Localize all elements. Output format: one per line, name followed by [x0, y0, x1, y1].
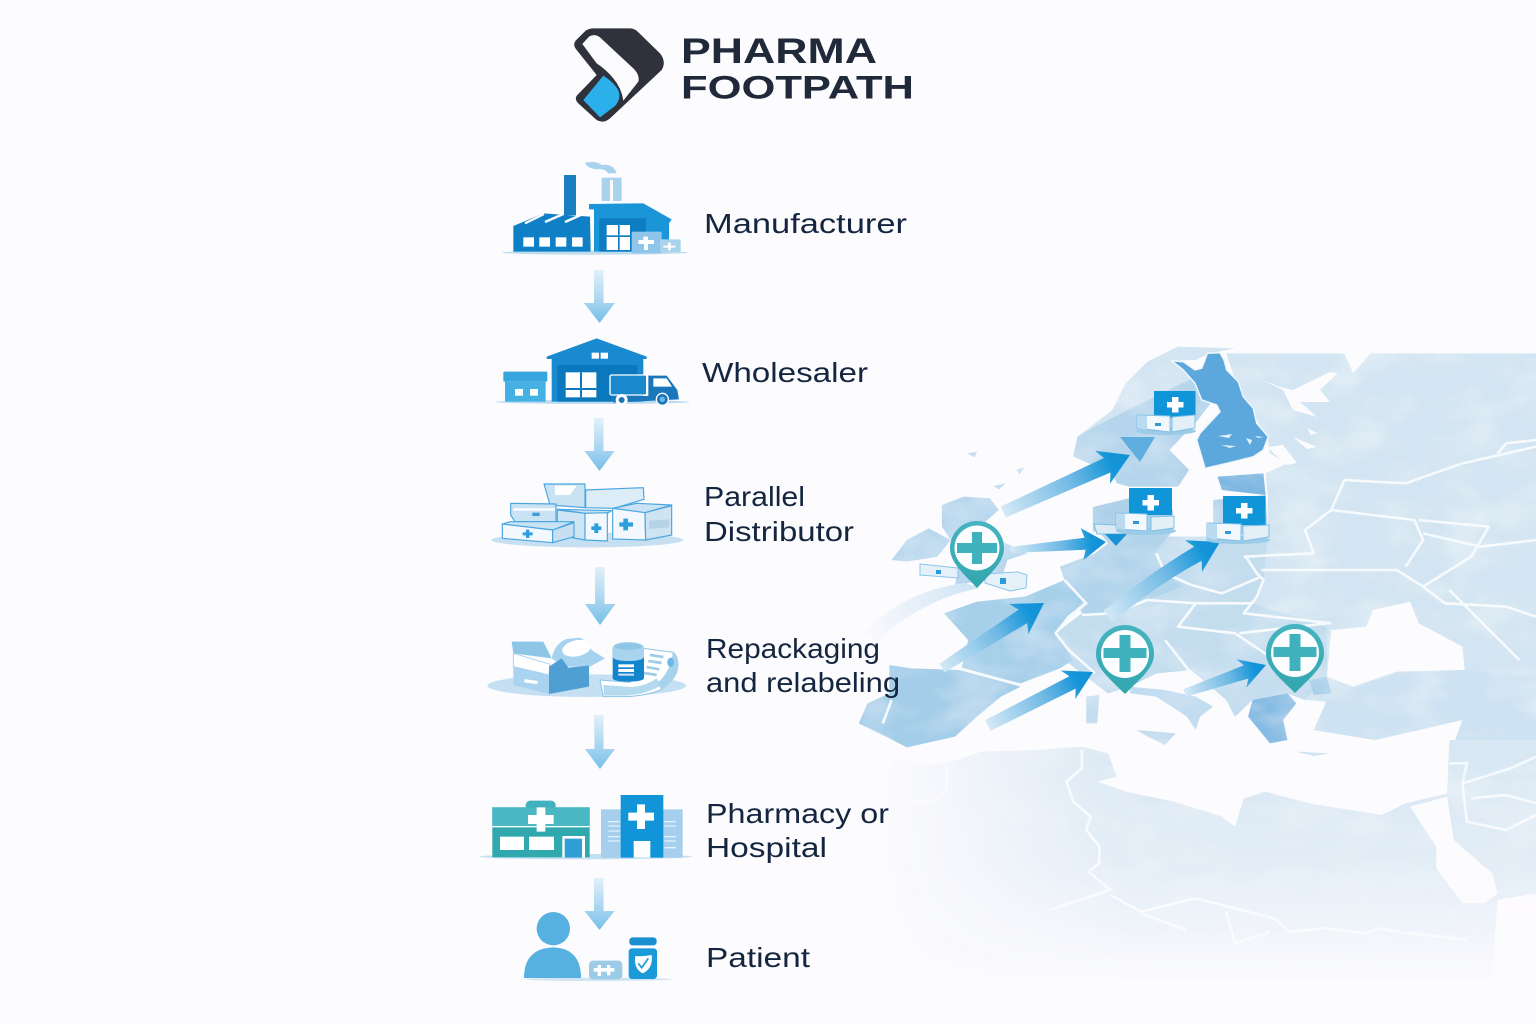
map icon: boxes in Denmark — [1094, 488, 1176, 546]
map of Europe — [858, 346, 1536, 945]
icon: stacked boxes — [491, 484, 683, 547]
icon: open box and labels — [487, 637, 686, 697]
title — [681, 32, 914, 106]
map pin: Italy — [1096, 625, 1154, 694]
map arrow: Spain to France — [932, 588, 1054, 683]
label: Patient: Patient — [706, 942, 810, 973]
label: Pharmacy or Hospital: Hospital — [706, 832, 827, 863]
label: Parallel Distributor: Distributor — [704, 516, 854, 547]
map pin: UK — [950, 521, 1004, 588]
map arrow: UK to Denmark — [1009, 526, 1107, 566]
label: Repackaging and relabeling: and relabeling — [706, 667, 900, 698]
logo — [574, 28, 664, 122]
label: Pharmacy or Hospital — [706, 798, 889, 863]
north africa and middle east — [942, 740, 1536, 945]
arrow: wholesaler to parallel distributor — [584, 418, 614, 471]
label: Manufacturer: Manufacturer — [704, 208, 907, 239]
label: Repackaging and relabeling: Repackaging — [706, 633, 880, 664]
map arrow: Italy to Greece — [1180, 651, 1271, 707]
arrow: pharmacy to patient — [584, 878, 614, 930]
map arrow: UK to Sweden — [996, 439, 1137, 528]
map arrow: Germany to Baltics — [1092, 526, 1229, 623]
icon: pharmacy and hospital — [479, 795, 692, 859]
icon: warehouse and truck — [495, 338, 690, 406]
label: Parallel Distributor: Parallel — [704, 481, 805, 512]
arrow: repackaging to pharmacy — [585, 715, 615, 769]
arrow: manufacturer to wholesaler — [584, 270, 615, 323]
map icon: boxes in Baltics — [1206, 496, 1270, 544]
map icon: boxes in Sweden — [1136, 391, 1196, 435]
label: Repackaging and relabeling — [706, 633, 900, 698]
title: FOOTPATH — [681, 70, 914, 106]
map region: Finland — [1172, 353, 1268, 468]
map marker: triangle below Sweden boxes — [1120, 437, 1155, 462]
icon: factory — [502, 162, 688, 255]
map arrow: Spain to Italy — [981, 658, 1100, 740]
map pin: Greece — [1266, 624, 1324, 693]
swoosh behind Spain and UK — [861, 583, 980, 640]
arrow: parallel distributor to repackaging — [585, 567, 616, 625]
map icon: boxes at UK pin — [920, 564, 1027, 591]
label: Wholesaler: Wholesaler — [702, 357, 868, 388]
icon: patient and medicine — [524, 912, 672, 981]
label: Parallel Distributor — [704, 481, 854, 547]
label: Pharmacy or Hospital: Pharmacy or — [706, 798, 889, 829]
title: PHARMA — [681, 32, 877, 71]
